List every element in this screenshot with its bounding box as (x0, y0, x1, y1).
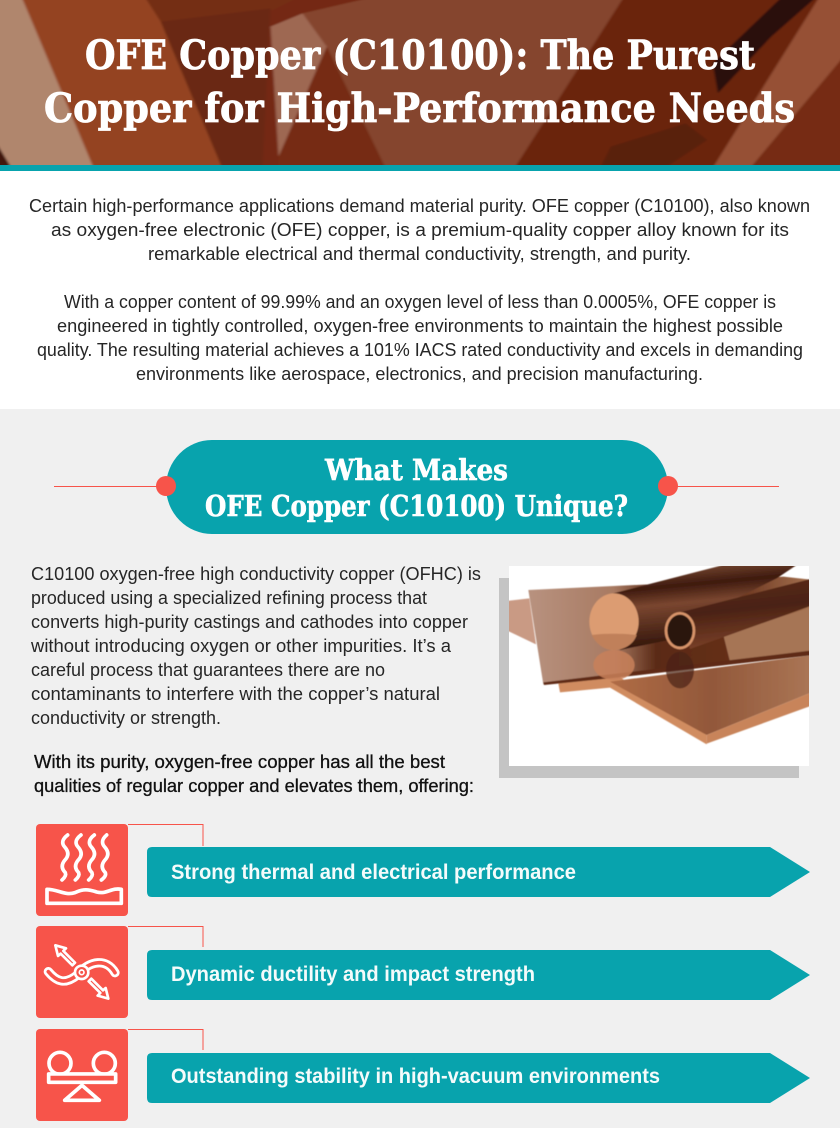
intro paragraph 2: engineered in tightly controlled, oxygen-free environments to maintain the highest possible (57, 316, 783, 336)
label arrow: strong thermal and electrical performance: Strong thermal and electrical performance (171, 861, 576, 884)
intro paragraph 1 (29, 196, 810, 264)
intro paragraph 1: Certain high-performance applications demand material purity. OFE copper (C10100), also known (29, 196, 810, 216)
text block: qualities lead-in (34, 752, 474, 796)
text block: refining process: careful process that guarantees there are no (31, 660, 385, 680)
icon: bending strip with arrows (36, 926, 203, 1018)
intro paragraph 1: as oxygen-free electronic (OFE) copper, is a premium-quality copper alloy known for its (51, 220, 789, 240)
label arrow: outstanding stability in high-vacuum environments (147, 1053, 810, 1103)
text block: refining process: conductivity or strength. (31, 708, 221, 728)
intro paragraph 2 (37, 292, 803, 384)
photo: copper rods and plates (499, 565, 813, 778)
label arrow: strong thermal and electrical performance (147, 847, 810, 897)
benefit 1: thermal and electrical (36, 824, 810, 916)
section heading pill: OFE Copper (C10100) Unique? (205, 489, 628, 523)
text block: refining process: C10100 oxygen-free high conductivity copper (OFHC) is (31, 564, 481, 584)
text block: qualities lead-in: qualities of regular copper and elevates them, offering: (34, 776, 474, 796)
section heading pill: What Makes (324, 453, 508, 487)
title: OFE Copper (C10100): The Purest (85, 32, 755, 79)
text block: qualities lead-in: With its purity, oxygen-free copper has all the best (34, 752, 445, 772)
panel: introduction (0, 171, 840, 409)
text block: refining process: converts high-purity castings and cathodes into copper (31, 612, 468, 632)
label arrow: outstanding stability in high-vacuum environments: Outstanding stability in high-vacuum environments (171, 1065, 660, 1088)
title (44, 32, 795, 132)
intro paragraph 1: remarkable electrical and thermal conductivity, strength, and purity. (148, 244, 691, 264)
teal rule under header (0, 165, 840, 171)
intro paragraph 2: environments like aerospace, electronics, and precision manufacturing. (136, 364, 703, 384)
text block: refining process: contaminants to interfere with the copper’s natural (31, 684, 440, 704)
title: Copper for High-Performance Needs (44, 85, 795, 132)
label arrow: dynamic ductility and impact strength: Dynamic ductility and impact strength (171, 963, 535, 986)
section heading pill (54, 440, 779, 534)
text block: refining process: without introducing oxygen or other impurities. It’s a (30, 636, 452, 656)
icon: balance with two spheres (36, 1029, 203, 1121)
benefit 3: vacuum stability (36, 1029, 810, 1121)
intro paragraph 2: quality. The resulting material achieves a 101% IACS rated conductivity and excels in demanding (37, 340, 803, 360)
text block: refining process (30, 564, 481, 728)
label arrow: dynamic ductility and impact strength (147, 950, 810, 1000)
header banner: copper photo background (0, 0, 840, 170)
intro paragraph 2: With a copper content of 99.99% and an oxygen level of less than 0.0005%, OFE copper is (64, 292, 776, 312)
benefit 2: ductility (36, 926, 810, 1018)
icon: heat waves (36, 824, 203, 916)
text block: refining process: produced using a specialized refining process that (31, 588, 427, 608)
